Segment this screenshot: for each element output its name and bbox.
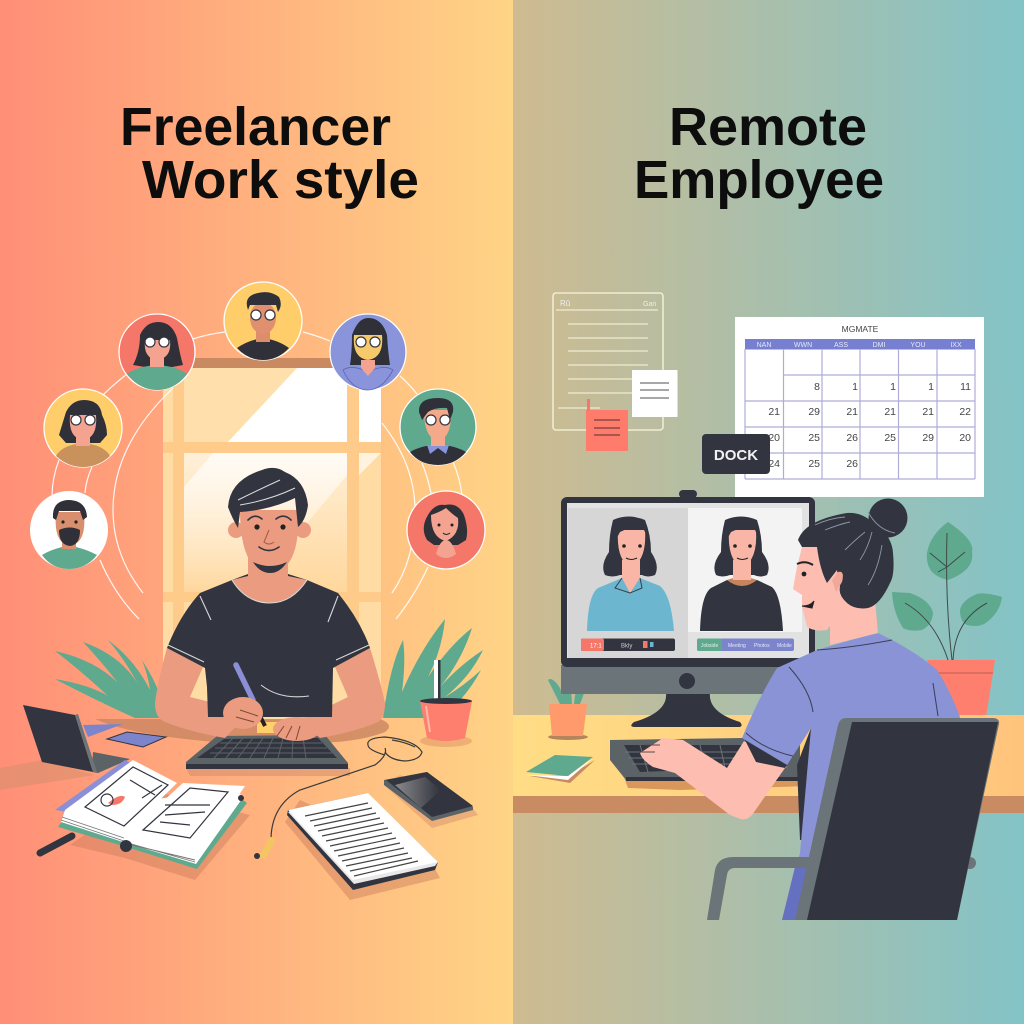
calendar: 24	[768, 458, 780, 470]
plant: right	[892, 522, 1002, 717]
plant: left	[55, 640, 162, 718]
calendar: DMI	[873, 342, 885, 349]
cord	[254, 737, 422, 859]
pot with pen	[420, 660, 472, 747]
avatar 2	[119, 314, 195, 390]
call controls: left: Bkly	[621, 644, 632, 650]
document outline	[553, 293, 663, 430]
calendar: 22	[959, 406, 971, 418]
calendar: 1	[928, 381, 934, 393]
calendar: 1	[890, 381, 896, 393]
panel: remote employee	[513, 0, 1024, 1024]
video tile: woman in black	[700, 516, 783, 631]
call controls: right: Photos	[754, 643, 770, 649]
call controls: left: 17:1	[590, 644, 602, 650]
calendar: MGMATE	[842, 324, 879, 334]
calendar: 11	[960, 381, 971, 393]
calendar: 26	[846, 432, 858, 444]
tablet: blue	[107, 732, 166, 747]
calendar: 25	[884, 432, 896, 444]
panel: freelancer	[0, 0, 513, 1024]
calendar: 20	[959, 432, 971, 444]
calendar: ASS	[834, 342, 848, 349]
call controls: left	[581, 638, 675, 651]
network arcs	[52, 332, 462, 619]
avatar 3	[330, 314, 406, 390]
tag: DOCK: DOCK	[714, 447, 758, 464]
avatar 4	[44, 389, 122, 467]
chair	[707, 718, 999, 920]
heading: Freelancer Work style: Freelancer	[120, 97, 391, 157]
heading: Remote Employee: Employee	[634, 150, 884, 210]
calendar: NAN	[757, 342, 771, 349]
open book	[40, 760, 250, 880]
avatar 1	[224, 282, 302, 360]
person: remote employee	[640, 498, 960, 920]
tag: DOCK	[702, 434, 770, 474]
tablet: dark	[384, 772, 478, 828]
window	[163, 358, 381, 720]
call controls: right: Mobile	[777, 643, 792, 649]
calendar: 26	[846, 458, 858, 470]
monitor	[561, 490, 815, 727]
heading: Remote Employee	[634, 97, 884, 210]
plant: right	[383, 619, 483, 718]
table shadow	[95, 719, 389, 743]
calendar: WWN	[794, 342, 812, 349]
notebook	[285, 793, 440, 900]
avatar 7	[407, 491, 485, 569]
calendar: 20	[768, 432, 780, 444]
call controls: right: Jobside	[701, 643, 718, 649]
calendar: 1	[852, 381, 858, 393]
calendar: 8	[814, 381, 820, 393]
desk	[513, 715, 1024, 813]
keyboard	[610, 738, 810, 790]
document outline: Rû	[560, 299, 570, 308]
small plant	[548, 666, 588, 740]
sticky note: red	[586, 399, 628, 451]
person: freelancer	[155, 468, 385, 741]
green notebook	[526, 755, 595, 783]
keyboard	[186, 735, 350, 776]
video tile: woman in blue	[587, 516, 674, 631]
call controls: right: Meeting	[728, 643, 746, 649]
avatar 5	[400, 389, 476, 465]
document outline: Gan	[643, 301, 656, 308]
calendar: 21	[846, 406, 858, 418]
avatars	[30, 282, 485, 569]
calendar: 25	[808, 432, 820, 444]
calendar: 21	[884, 406, 896, 418]
calendar: IXX	[950, 342, 962, 349]
calendar: 21	[768, 406, 780, 418]
calendar	[735, 317, 984, 497]
call controls: right	[697, 638, 794, 651]
heading: Remote Employee: Remote	[669, 97, 867, 157]
calendar: 25	[808, 458, 820, 470]
calendar: 21	[922, 406, 934, 418]
calendar: YOU	[910, 342, 926, 349]
heading: Freelancer Work style: Work style	[142, 150, 419, 210]
avatar 6	[30, 491, 108, 569]
heading: Freelancer Work style	[120, 97, 419, 210]
calendar: 29	[922, 432, 934, 444]
calendar: 29	[808, 406, 820, 418]
laptop	[0, 705, 130, 790]
sticky note: white	[632, 370, 678, 417]
